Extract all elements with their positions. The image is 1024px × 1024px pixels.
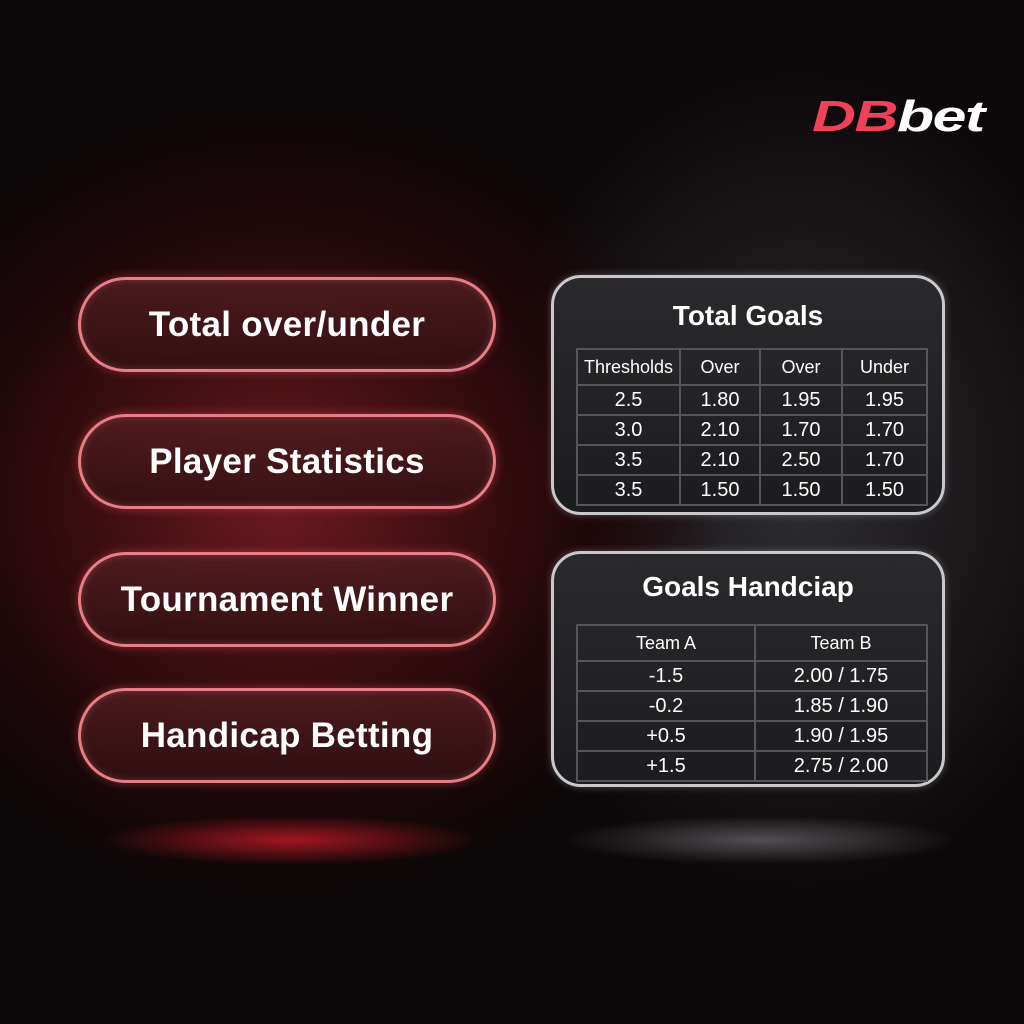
panel: Total Goals	[551, 275, 945, 515]
table: handicap odds: +1.5	[646, 754, 686, 776]
table: handicap odds: Team B	[810, 632, 872, 652]
pill: Total over/under: Total over/under	[149, 304, 425, 344]
table: handicap odds: 2.75 / 2.00	[794, 754, 888, 776]
pill: Tournament Winner	[78, 552, 496, 647]
table: total goals odds	[576, 348, 928, 506]
table: total goals odds: 1.80	[701, 388, 739, 410]
table: total goals odds: 1.70	[782, 418, 820, 440]
table: handicap odds: 1.85 / 1.90	[794, 694, 888, 716]
pill: Handicap Betting: Handicap Betting	[141, 716, 433, 754]
table: total goals odds: 1.50	[865, 478, 904, 500]
table: total goals odds: 2.50	[782, 448, 820, 470]
pill: Handicap Betting	[78, 688, 496, 783]
table: handicap odds: Team A	[636, 632, 696, 652]
pill: Player Statistics	[78, 414, 496, 509]
pill: Tournament Winner: Tournament Winner	[121, 580, 453, 618]
table: total goals odds: 3.5	[615, 448, 642, 470]
table: handicap odds: -1.5	[649, 664, 683, 686]
pill: Total over/under	[78, 277, 496, 372]
table: total goals odds: Under	[860, 356, 909, 376]
table: total goals odds: 1.50	[782, 478, 820, 500]
heading: Goals Handciap: Goals Handciap	[642, 571, 854, 602]
table: total goals odds: Thresholds	[584, 356, 673, 376]
table: handicap odds: -0.2	[649, 694, 683, 716]
heading: Total Goals: Total Goals	[673, 300, 823, 331]
table: handicap odds: +0.5	[646, 724, 686, 746]
table: handicap odds: 1.90 / 1.95	[794, 724, 888, 746]
table: total goals odds: 2.5	[615, 388, 642, 410]
floor glow red	[100, 815, 480, 865]
logo: DBbet	[812, 92, 984, 141]
table: handicap odds	[576, 624, 928, 782]
table: handicap odds: 2.00 / 1.75	[794, 664, 888, 686]
table: total goals odds: Over	[700, 356, 740, 376]
floor glow grey	[560, 815, 960, 865]
table: total goals odds: 3.0	[615, 418, 642, 440]
table: total goals odds: Over	[781, 356, 820, 376]
table: total goals odds: 2.10	[701, 418, 739, 440]
table: total goals odds: 1.70	[865, 418, 904, 440]
pill: Player Statistics: Player Statistics	[149, 442, 425, 480]
table: total goals odds: 1.70	[865, 448, 904, 470]
table: total goals odds: 1.95	[782, 388, 820, 410]
table: total goals odds: 1.95	[865, 388, 904, 410]
panel: Goals Handicap	[551, 551, 945, 787]
table: total goals odds: 1.50	[701, 478, 739, 500]
table: total goals odds: 3.5	[615, 478, 642, 500]
table: total goals odds: 2.10	[701, 448, 739, 470]
